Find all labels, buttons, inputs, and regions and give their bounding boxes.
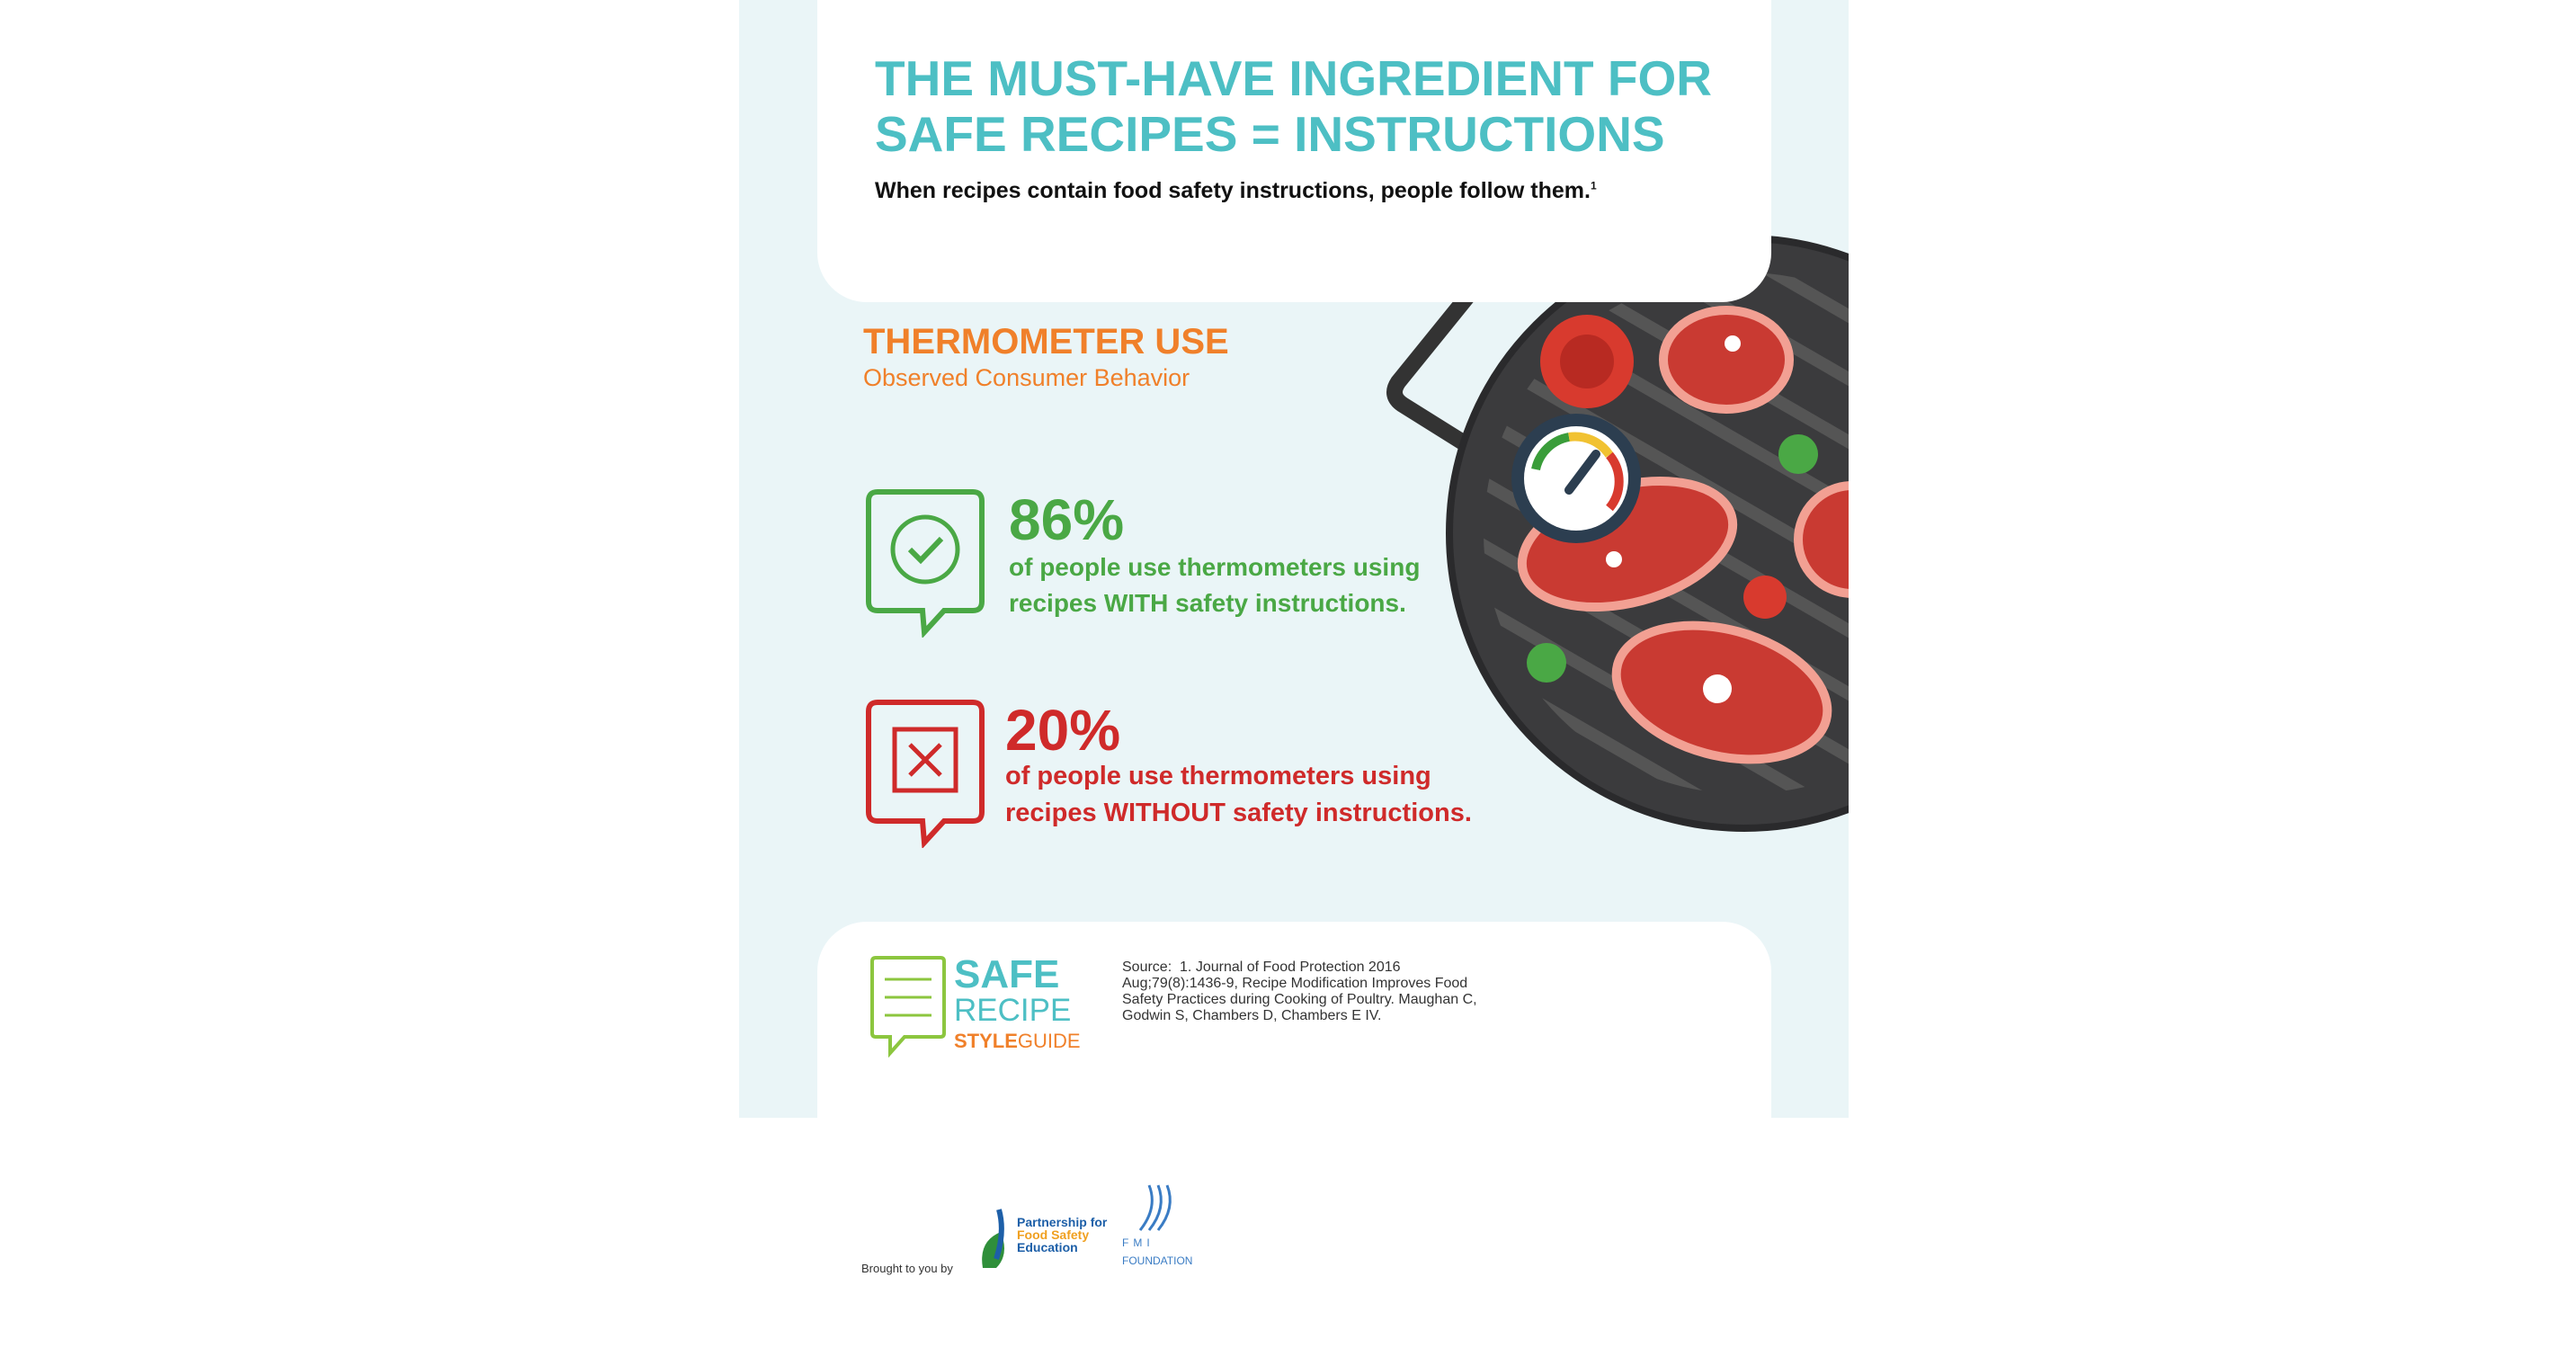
- title: THE MUST-HAVE INGREDIENT FOR: [875, 50, 1712, 106]
- section heading: THERMOMETER USE: [863, 322, 1229, 362]
- grill body: [1453, 243, 1849, 825]
- section heading: [863, 322, 1229, 391]
- logo: safe recipe style guide: SAFE: [954, 952, 1059, 996]
- logo: FMI foundation: [1122, 1185, 1192, 1267]
- tomatoes: [1540, 315, 1634, 408]
- thermometer dial: [1511, 414, 1641, 543]
- stat: 20% without instructions: of people use thermometers using: [1005, 762, 1431, 790]
- logo: FMI foundation: FOUNDATION: [1122, 1254, 1192, 1267]
- credits: Brought to you by: [861, 1262, 953, 1275]
- logo: FMI foundation: FMI: [1122, 1236, 1154, 1249]
- logo: safe recipe style guide: STYLEGUIDE: [954, 1030, 1081, 1052]
- logo: partnership for food safety education: Partnership for: [1017, 1215, 1107, 1229]
- stat: 86% with instructions: [866, 487, 1420, 638]
- footer card: [817, 922, 1771, 1118]
- stat: 20% without instructions: 20%: [1005, 698, 1120, 763]
- logo: partnership for food safety education: [982, 1209, 1108, 1268]
- steaks: [1518, 306, 1849, 764]
- stat: 20% without instructions: recipes WITHOUT safety instructions.: [1005, 799, 1472, 827]
- logo: partnership for food safety education: Education: [1017, 1240, 1078, 1254]
- grill handle: [1395, 288, 1475, 450]
- stat: 86% with instructions: of people use thermometers using: [1009, 553, 1420, 581]
- icon: check speech bubble: [866, 489, 985, 638]
- grill illustration: [1386, 236, 1849, 832]
- subtitle: When recipes contain food safety instructions, people follow them.1: [875, 178, 1597, 203]
- background panel: [739, 0, 1849, 1118]
- title: [875, 50, 1712, 162]
- logo: safe recipe style guide: RECIPE: [954, 993, 1071, 1028]
- herbs: [1778, 434, 1818, 474]
- title: SAFE RECIPES = INSTRUCTIONS: [875, 106, 1665, 162]
- icon: x speech bubble: [866, 700, 985, 848]
- stat: 86% with instructions: 86%: [1009, 487, 1124, 552]
- source text: Source: 1. Journal of Food Protection 2016 Aug;79(8):1436-9, Recipe Modification Improves Food Safety Practices during Cooking of Poultry. Maughan C, Godwin S, Chambers D, Chambers E IV.: [1122, 960, 1477, 1023]
- credits: [861, 1185, 1192, 1275]
- stat: 86% with instructions: recipes WITH safety instructions.: [1009, 589, 1406, 617]
- stat: 20% without instructions: [866, 698, 1472, 848]
- logo: partnership for food safety education: Food Safety: [1017, 1227, 1089, 1242]
- logo: safe recipe style guide: [870, 952, 1081, 1058]
- section heading: Observed Consumer Behavior: [863, 364, 1190, 391]
- header card: [817, 0, 1771, 302]
